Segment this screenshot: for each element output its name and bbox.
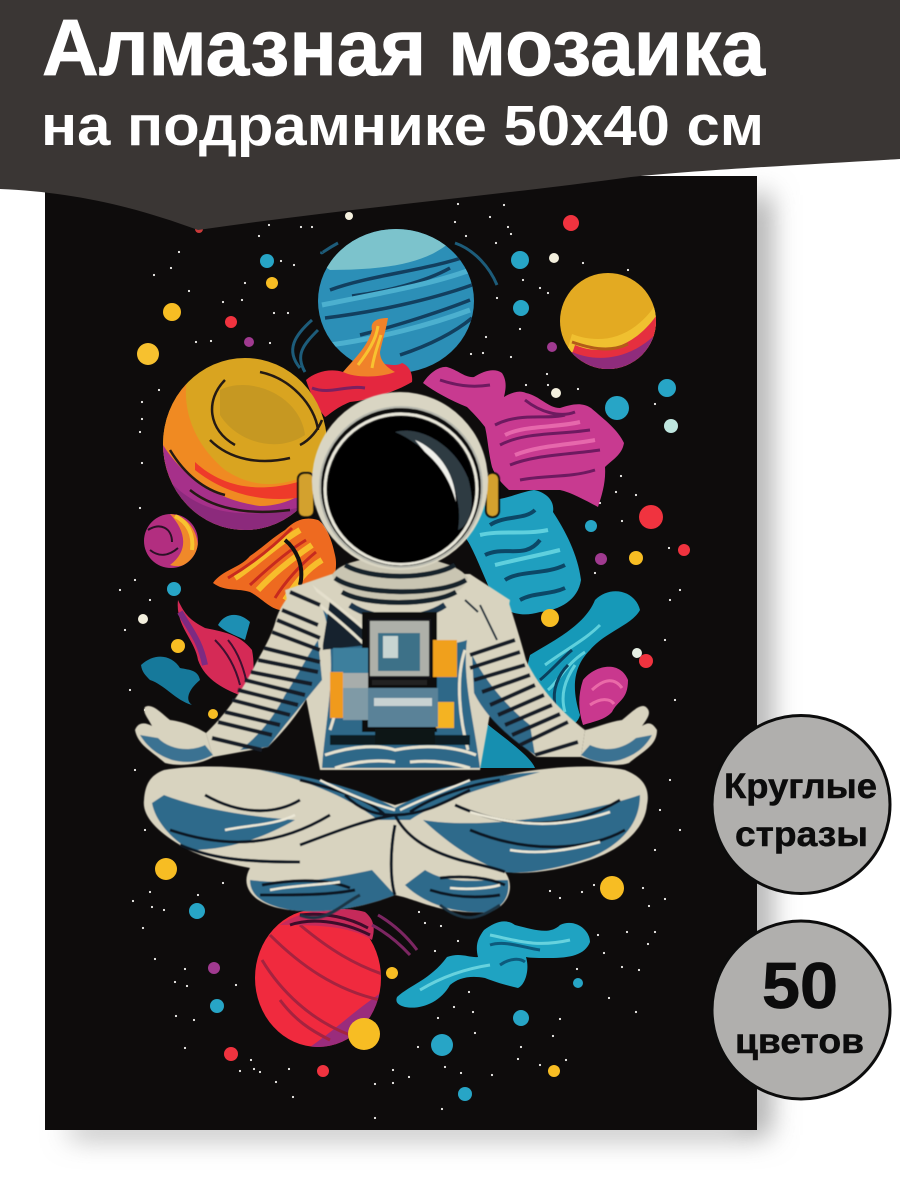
planet: big orange left [160, 355, 330, 535]
right arm [466, 582, 585, 757]
badge: 50 colours: цветов [735, 1022, 864, 1061]
canvas shadow [70, 195, 769, 1136]
leg shading [152, 770, 640, 912]
planet: blue top [293, 225, 497, 380]
artwork canvas [45, 176, 757, 1130]
header banner [0, 0, 900, 230]
chest pack [330, 612, 457, 745]
teal smoke bottom [396, 921, 590, 1008]
collar [332, 557, 468, 603]
subtitle: на подрамнике 50х40 см [41, 94, 764, 158]
blue puff left [218, 615, 250, 640]
badge: 50 colours: 50 [762, 949, 838, 1022]
badge: round rhinestones: Круглые [724, 767, 877, 806]
planet: bottom red [250, 905, 417, 1050]
badge: round rhinestones [712, 716, 890, 894]
teal smoke right [472, 591, 640, 768]
badge: round rhinestones: стразы [735, 815, 868, 854]
right hand [581, 706, 657, 765]
left arm [206, 582, 323, 757]
legs [144, 766, 648, 912]
badge: 50 colours [712, 921, 890, 1099]
planet: yellow right [560, 273, 656, 369]
teal nebula [457, 490, 581, 614]
visor reflection [395, 431, 472, 530]
red swirl left [178, 600, 254, 697]
astronaut [135, 392, 657, 918]
headphones [298, 473, 314, 517]
planet: small left [144, 514, 198, 568]
coloured dots [137, 212, 690, 1101]
torso [285, 574, 510, 770]
star field [120, 204, 680, 1118]
left hand [135, 706, 213, 765]
helmet [312, 392, 488, 570]
title: Алмазная мозаика [42, 3, 765, 92]
red flame top [306, 362, 412, 417]
pink nebula [306, 318, 624, 507]
pink smoke right [579, 667, 628, 725]
teal low behind arm [472, 715, 535, 768]
teal swirl left [141, 657, 200, 705]
orange flames [213, 518, 336, 630]
